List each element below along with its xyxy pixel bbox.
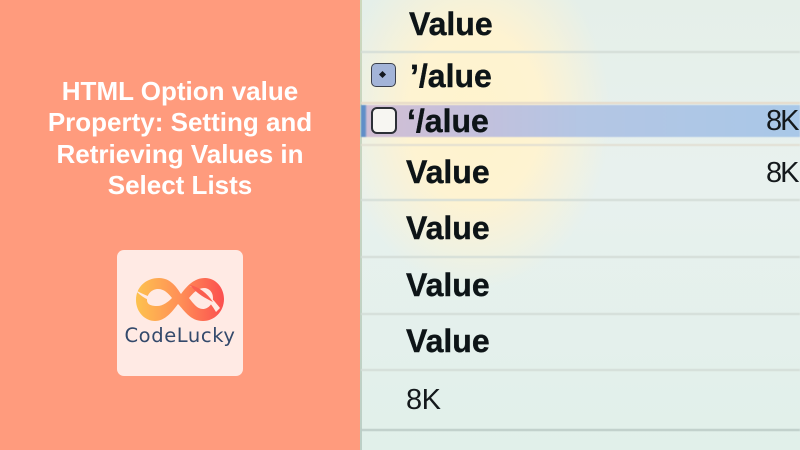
- title: HTML Option value Property: Setting and Retrieving Values in Select Lists: [48, 76, 312, 200]
- row label: Value: [406, 267, 490, 303]
- checkbox: selected: [371, 63, 396, 87]
- row label: Value: [406, 210, 490, 246]
- value: highlighted row: 8K: [766, 105, 797, 137]
- row label: highlighted: ʻ/alue: [407, 103, 489, 139]
- row label: Value: [406, 154, 490, 190]
- icon: infinity: [136, 278, 224, 321]
- value: 8K: [406, 384, 440, 416]
- value: 8K: [766, 157, 797, 189]
- checkbox: highlighted row: [371, 107, 397, 134]
- panel: screenshot background: [360, 0, 800, 450]
- row label: Value: [406, 323, 490, 359]
- logo wordmark: CodeLucky: [124, 324, 236, 347]
- row label: selected: ʼ/alue: [410, 58, 492, 94]
- screen edge: [360, 0, 362, 450]
- logo card: [117, 250, 243, 376]
- highlighted row: [361, 105, 800, 137]
- row label: Value: [409, 6, 493, 42]
- panel: left coral: [0, 0, 360, 450]
